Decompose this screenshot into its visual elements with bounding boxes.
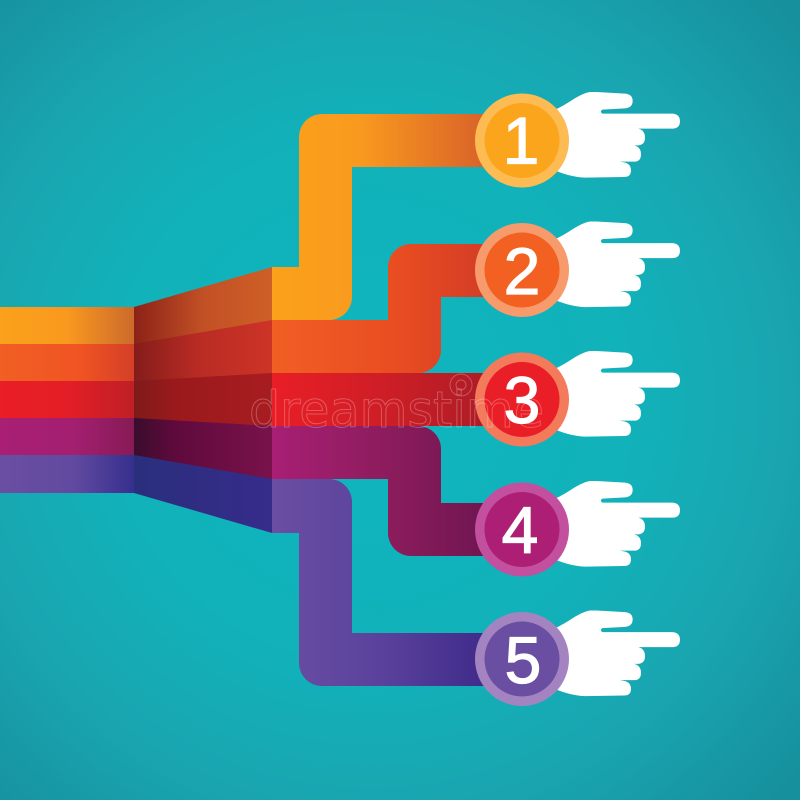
badge 5 xyxy=(475,612,569,706)
ribbon 3 xyxy=(272,373,490,426)
ribbon 2 xyxy=(272,244,490,373)
pointing hand 4 xyxy=(550,481,680,567)
left stripe bands xyxy=(0,307,134,493)
ribbon 4 xyxy=(272,426,490,556)
badge 1 xyxy=(475,94,569,188)
pointing hand 2 xyxy=(550,221,680,307)
badge 2: 2 xyxy=(504,234,540,308)
badge 4 xyxy=(475,482,569,576)
folded perspective section xyxy=(134,267,272,533)
badge 3: 3 xyxy=(504,363,540,437)
ribbon 5 xyxy=(272,479,490,686)
badge 2 xyxy=(475,223,569,317)
ribbon 1 xyxy=(272,114,490,320)
watermark: dreamstime xyxy=(249,381,544,439)
pointing hand 3 xyxy=(550,351,680,437)
badge 5: 5 xyxy=(505,623,541,697)
pointing hand 1 xyxy=(550,92,680,178)
pointing hand 5 xyxy=(550,610,680,696)
badge 1: 1 xyxy=(503,104,539,178)
badge 3 xyxy=(475,352,569,446)
badge 4: 4 xyxy=(502,493,538,567)
